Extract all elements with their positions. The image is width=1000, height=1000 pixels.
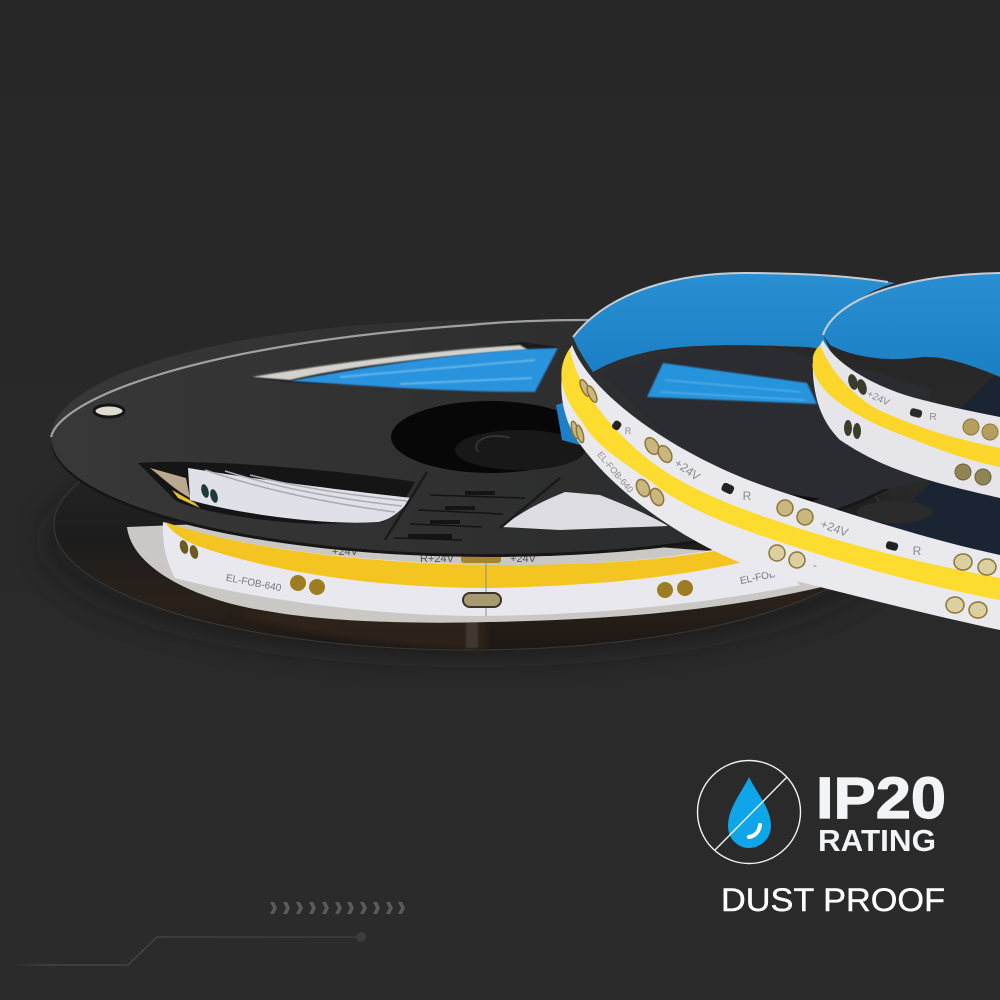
lower coil printed labels [225, 546, 780, 594]
loose coil one: blue strip back [573, 273, 895, 372]
printed labels: +24V [672, 456, 703, 484]
printed labels [865, 389, 937, 423]
lower coil printed labels: EL-FOB- [739, 568, 780, 587]
product photo: LED strip reel [45, 273, 1000, 658]
lower coil solder pads [178, 539, 693, 607]
blue strip glimpse beside hub [556, 400, 580, 445]
printed labels: +24V [865, 389, 891, 409]
lower coil printed labels: +24V [510, 553, 537, 565]
printed labels: R [929, 412, 937, 423]
loose coil two: blue strip back [823, 273, 1000, 377]
reel top plate [51, 320, 929, 557]
loose coil one: rim [573, 273, 888, 337]
yellow band [561, 348, 1000, 600]
loose coil two: white strip with yellow COB band [812, 340, 1000, 498]
lower right reel window [502, 492, 668, 530]
decorative circuit line [13, 932, 366, 965]
subheading: RATING: RATING [818, 823, 936, 858]
resistors [611, 419, 899, 551]
printed labels: R [913, 544, 922, 558]
reel shadow [45, 422, 895, 658]
decorative chevron row [270, 902, 405, 914]
solder pads [570, 378, 996, 618]
reel mounting hole [94, 405, 124, 417]
printed labels: R [625, 426, 632, 436]
upper reel window [250, 342, 559, 392]
loose coil one: white strip with yellow COB band [561, 345, 1000, 630]
printed labels [595, 426, 922, 572]
printed labels: R [743, 489, 752, 503]
printed labels: +24V [819, 517, 850, 540]
heading: IP20: IP20 [816, 766, 946, 831]
reel hub opening [391, 401, 589, 473]
dark back area behind loose coils [880, 370, 1000, 560]
solder pads [844, 373, 998, 485]
printed labels: EL-FOB-640 [595, 450, 635, 495]
upper plate area seen through large coil [600, 354, 930, 500]
reel bottom plate [54, 400, 886, 650]
lower left reel window [138, 462, 415, 524]
yellow band [812, 345, 1000, 467]
IP20 badge [698, 760, 946, 918]
plate window seen through large coil [647, 363, 817, 404]
caption: DUST PROOF: DUST PROOF [721, 882, 945, 918]
reel spoke with embossed marks [385, 472, 560, 540]
lower coil printed labels: R+24V [420, 553, 455, 565]
icon: crossed water drop [698, 760, 800, 864]
lower coil of LED strip [127, 520, 830, 623]
printed labels: - [813, 558, 817, 572]
lower coil printed labels: +24V [332, 546, 359, 558]
lower coil printed labels: EL-FOB-640 [225, 573, 283, 594]
